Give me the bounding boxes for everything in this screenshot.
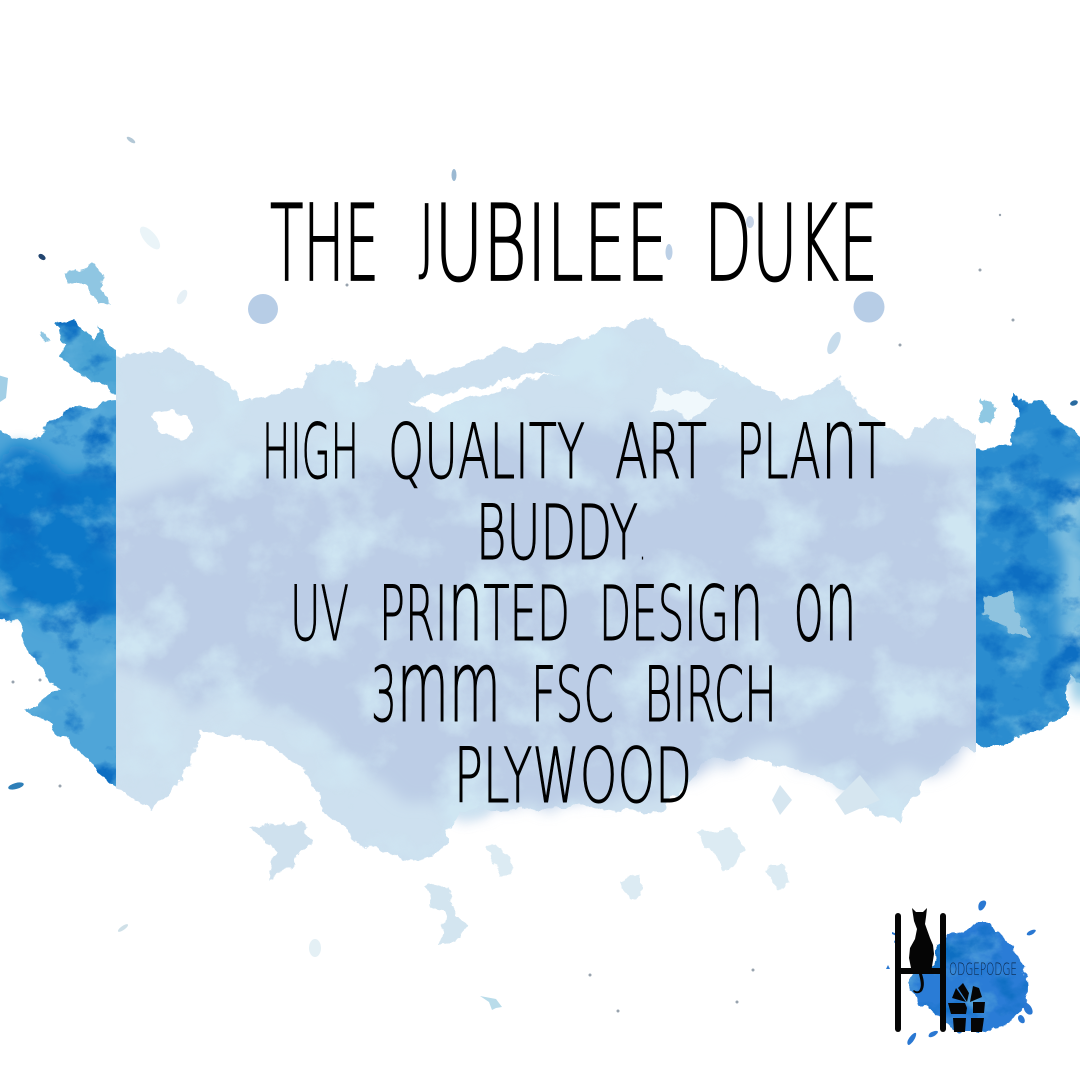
description text block: PLAnT [736,385,886,502]
description text block: UV [290,569,349,658]
title: THE [270,183,379,305]
title: UBILEE [434,183,668,305]
description text block: BIRCH [644,650,777,739]
logo: Hodgepodge [886,901,1036,1045]
description text block: HIGH [262,407,359,496]
description text block: FSC [531,650,614,739]
description text block: QUALITY [388,407,585,496]
description text block: . [640,532,645,567]
logo gift icon [948,983,985,1032]
description text block: 3mm [371,628,501,745]
logo letter H with cat [895,908,946,1032]
description text block [262,385,886,820]
description text block: PRInTED [379,547,570,664]
watercolour wash: centre panel [100,317,990,948]
title: J [419,189,434,284]
watercolour wash: right splash [970,396,1080,743]
description text block: BUDDY [476,488,638,577]
logo wordmark: ODGEPODGE [949,960,1017,980]
title: DUKE [704,183,878,305]
title [270,183,878,305]
description text block: ART [615,407,707,496]
watercolour wash: left splash [0,266,125,792]
description text block: DESIGn [599,547,764,664]
description text block: on [793,547,857,664]
description text block: PLYWOOD [454,731,692,820]
logo splash [886,901,1036,1045]
